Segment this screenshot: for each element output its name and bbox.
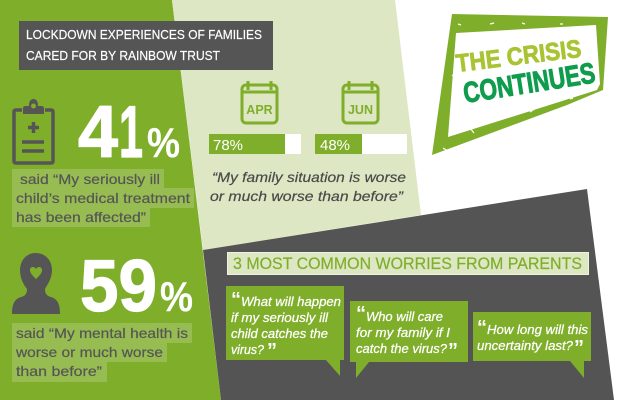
text block: medical treatment caption: child’s medical treatment: [16, 190, 190, 206]
stat: 59 percent: %: [160, 273, 193, 320]
speech bubble: who will care: ”: [448, 340, 458, 362]
icon: June calendar: JUN: [348, 103, 373, 117]
heading: three most common worries: 3 MOST COMMON WORRIES FROM PARENTS: [233, 255, 582, 273]
panel: green background: [0, 0, 221, 400]
text block: family situation quote: [210, 169, 406, 204]
speech bubble: how long: uncertainty last?: [477, 339, 573, 353]
panel: dark grey background: [203, 189, 614, 400]
logo: the crisis continues: [432, 14, 608, 155]
speech bubble: who will care: catch the virus?: [356, 342, 447, 356]
icon: April calendar: [242, 81, 277, 123]
speech bubble: what will happen: virus?: [231, 343, 264, 357]
heading: lockdown experiences: [19, 21, 273, 70]
text block: mental health caption: said “My mental health is: [16, 325, 188, 341]
icon: clipboard: [14, 99, 53, 163]
heading: lockdown experiences: LOCKDOWN EXPERIENCES OF FAMILIES: [26, 27, 262, 42]
bar chart: June 48 percent: 48%: [320, 137, 350, 154]
speech bubble: who will care: for my family if I: [356, 326, 451, 340]
text block: mental health caption: worse or much worse: [15, 344, 163, 360]
text block: mental health caption: than before”: [16, 363, 102, 379]
speech bubble: what will happen: child catches the: [231, 327, 328, 341]
speech bubble: who will care: [350, 301, 468, 378]
text block: family situation quote: or much worse than before”: [210, 188, 404, 204]
stat: 41 percent: [78, 92, 180, 173]
icon: June calendar: [343, 81, 378, 123]
icon: person with heart: [12, 253, 60, 314]
icon: April calendar: APR: [246, 103, 273, 117]
bar chart: June 48 percent: [315, 134, 407, 154]
bar chart: April 78 percent: [209, 134, 301, 154]
speech bubble: what will happen: “: [231, 289, 241, 311]
speech bubble: what will happen: What will happen: [241, 295, 341, 309]
stat: 41 percent: 1: [119, 92, 143, 173]
speech bubble: what will happen: ”: [267, 340, 277, 362]
text block: family situation quote: “My family situation is worse: [212, 169, 406, 185]
speech bubble: how long: ”: [574, 337, 584, 359]
speech bubble: what will happen: if my seriously ill: [231, 311, 329, 325]
logo: the crisis continues: THE CRISIS: [454, 35, 583, 78]
stat: 59 percent: 59: [80, 246, 157, 327]
speech bubble: what will happen: [226, 286, 344, 376]
text block: medical treatment caption: said “My seriously ill: [20, 171, 160, 187]
text block: medical treatment caption: has been affected”: [16, 209, 146, 225]
stat: 41 percent: 4: [78, 92, 118, 173]
speech bubble: who will care: Who will care: [366, 310, 443, 324]
speech bubble: who will care: “: [356, 303, 366, 325]
speech bubble: how long: “: [477, 317, 487, 339]
stat: 41 percent: %: [147, 119, 180, 166]
heading: lockdown experiences: CARED FOR BY RAINBOW TRUST: [26, 48, 220, 63]
bar chart: April 78 percent: 78%: [213, 137, 243, 154]
speech bubble: how long: How long will this: [487, 323, 588, 337]
speech bubble: how long: [473, 312, 591, 378]
panel: light green background: [172, 0, 421, 250]
text block: medical treatment caption: [12, 169, 194, 227]
text block: mental health caption: [12, 323, 192, 382]
